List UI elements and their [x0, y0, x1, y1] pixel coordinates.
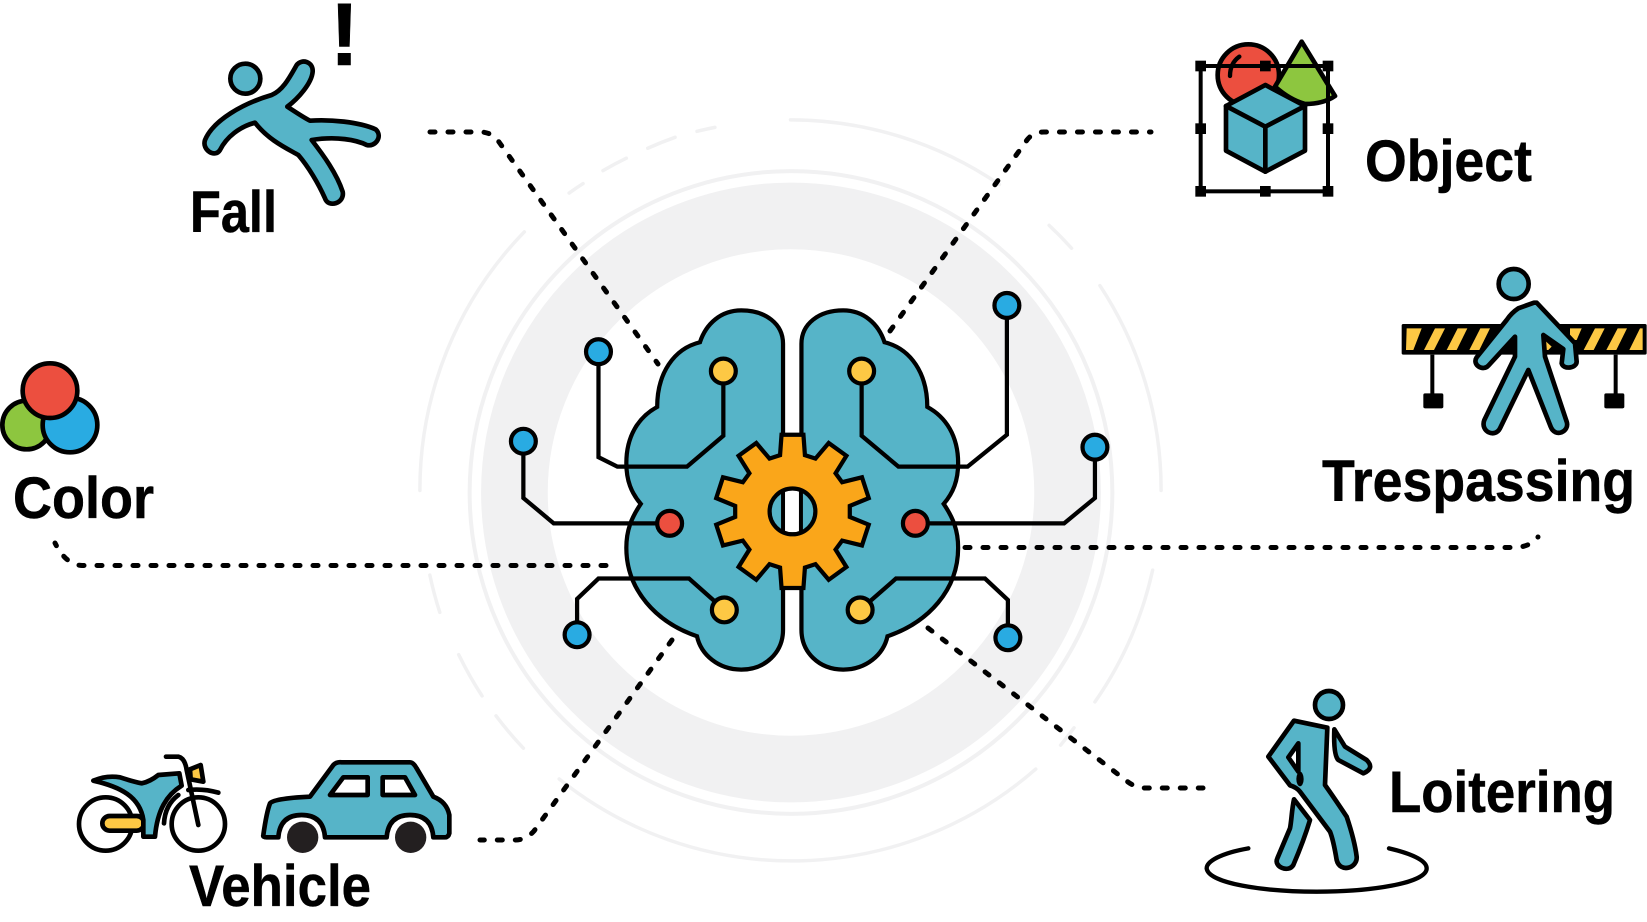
motorcycle — [79, 757, 225, 851]
label: Fall: Fall — [190, 180, 277, 245]
icon: motorcycle and car — [79, 757, 449, 853]
brain left hemisphere — [626, 310, 783, 670]
circuit nodes — [511, 293, 1107, 650]
label: Color: Color — [13, 466, 154, 531]
car — [263, 762, 449, 853]
icon: loitering person in circle — [1207, 691, 1427, 892]
icon: falling person — [204, 62, 379, 204]
dotted connector: object — [890, 132, 1151, 331]
central gap between hemispheres — [786, 344, 799, 637]
dotted connector: trespassing — [965, 537, 1538, 548]
barrier — [1402, 324, 1647, 408]
brain with circuit and gear — [511, 293, 1107, 670]
label: Loitering: Loitering — [1389, 760, 1615, 825]
label: Vehicle: Vehicle — [189, 854, 371, 919]
background rings — [420, 120, 1161, 861]
icon: person crossing barrier — [1402, 269, 1647, 433]
brain right hemisphere — [801, 310, 958, 670]
icon: color circles — [2, 363, 97, 452]
dotted connector: loitering — [928, 628, 1203, 788]
dotted connector: color — [55, 543, 606, 566]
gear — [716, 435, 869, 588]
dotted connector: vehicle — [480, 640, 672, 840]
icon: object shapes in selection frame — [1195, 42, 1335, 197]
dotted connector: fall — [430, 132, 658, 364]
circuit traces — [523, 305, 1095, 638]
label: Object: Object — [1365, 129, 1532, 194]
